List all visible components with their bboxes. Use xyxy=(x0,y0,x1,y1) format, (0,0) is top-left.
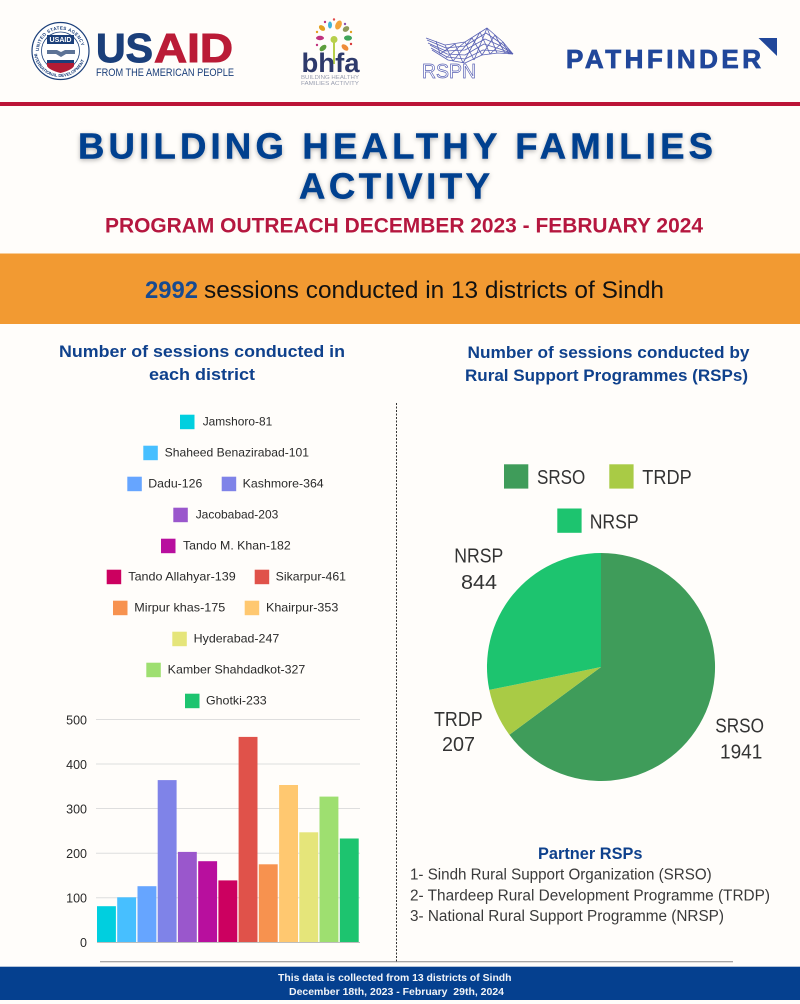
logo: bhfa: bhfa xyxy=(302,48,360,78)
left heading: each district xyxy=(149,365,255,384)
bar chart: 200 xyxy=(66,847,87,861)
footer band: December 18th, 2023 - February 29th, 2024 xyxy=(289,986,504,998)
logo header xyxy=(31,18,777,87)
bar chart: 400 xyxy=(66,758,87,772)
pie chart: TRDP xyxy=(434,709,483,731)
title xyxy=(78,126,713,206)
pie legend: TRDP xyxy=(642,467,692,489)
pie chart xyxy=(434,546,764,781)
right heading: Rural Support Programmes (RSPs) xyxy=(465,366,748,385)
pie legend: SRSO xyxy=(537,467,585,489)
title: BUILDING HEALTHY FAMILIES xyxy=(78,126,713,166)
orange summary band: sessions conducted in 13 districts of Sindh xyxy=(204,277,664,304)
partner RSPs: 2- Thardeep Rural Development Programme (TRDP) xyxy=(410,887,770,904)
district legend: Jacobabad-203 xyxy=(196,508,279,522)
logo: USAID: AID xyxy=(154,25,233,71)
right heading xyxy=(465,343,750,385)
pie chart: 207 xyxy=(442,734,475,756)
bar chart: 0 xyxy=(80,936,87,950)
logo: USAID: USAID xyxy=(50,37,72,44)
orange summary band: 2992 xyxy=(145,277,198,304)
district legend: Hyderabad-247 xyxy=(194,632,280,646)
bar chart: 100 xyxy=(66,892,87,906)
pie chart: 844 xyxy=(461,572,497,594)
pie chart: NRSP xyxy=(454,546,503,568)
header rule xyxy=(0,102,800,106)
logo: bhfa: FAMILIES ACTIVITY xyxy=(301,81,359,87)
partner RSPs: 1- Sindh Rural Support Organization (SRSO) xyxy=(410,866,712,883)
district legend: Khairpur-353 xyxy=(266,600,339,614)
right heading: Number of sessions conducted by xyxy=(468,343,750,362)
subtitle: PROGRAM OUTREACH DECEMBER 2023 - FEBRUARY 2024 xyxy=(105,213,703,237)
left heading xyxy=(59,342,345,384)
pie legend: NRSP xyxy=(590,511,639,533)
bar chart: 500 xyxy=(66,714,87,728)
bar chart xyxy=(66,714,360,950)
left heading: Number of sessions conducted in xyxy=(59,342,345,361)
footer band xyxy=(0,967,800,1000)
logo: USAID: UNITED STATES AGENCY xyxy=(36,26,84,51)
district legend: Mirpur khas-175 xyxy=(134,600,226,614)
district legend: Shaheed Benazirabad-101 xyxy=(165,446,309,460)
logo: USAID: FROM THE AMERICAN PEOPLE xyxy=(96,67,234,79)
logo: USAID xyxy=(31,22,234,80)
orange summary band xyxy=(0,254,800,324)
logo: RSPN: RSPN xyxy=(422,61,476,83)
logo: USAID: US xyxy=(96,25,153,71)
logo: Pathfinder: PATHFINDER xyxy=(566,44,761,74)
district legend: Kashmore-364 xyxy=(243,476,324,490)
bar chart: 300 xyxy=(66,802,87,816)
district legend: Ghotki-233 xyxy=(206,694,267,708)
logo: USAID: INTERNATIONAL DEVELOPMENT xyxy=(34,54,84,77)
pie chart: 1941 xyxy=(720,741,762,763)
district legend: Kamber Shahdadkot-327 xyxy=(168,662,306,676)
pie chart: SRSO xyxy=(715,715,764,737)
district legend: Jamshoro-81 xyxy=(203,414,273,428)
district legend: Sikarpur-461 xyxy=(276,570,346,584)
title: ACTIVITY xyxy=(299,166,490,206)
partner RSPs: 3- National Rural Support Programme (NRSP) xyxy=(410,908,724,925)
district legend xyxy=(107,414,346,708)
partner RSPs: Partner RSPs xyxy=(538,845,642,863)
logo: bhfa xyxy=(301,18,360,87)
pie legend xyxy=(504,464,692,533)
district legend: Tando Allahyar-139 xyxy=(128,570,236,584)
district legend: Dadu-126 xyxy=(148,476,203,490)
district legend: Tando M. Khan-182 xyxy=(183,538,291,552)
footer band: This data is collected from 13 districts of Sindh xyxy=(278,972,512,984)
partner RSPs xyxy=(410,845,770,925)
logo: RSPN xyxy=(422,28,513,83)
logo: bhfa: BUILDING HEALTHY xyxy=(301,75,359,81)
